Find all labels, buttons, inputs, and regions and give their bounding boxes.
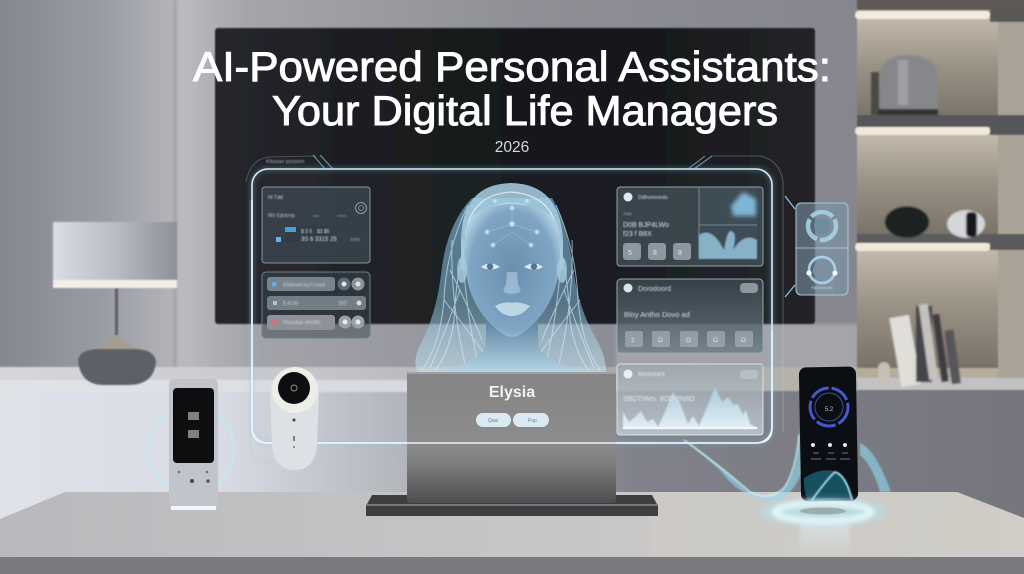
panel: finance card: 3S 6 3315 25 [301, 237, 337, 243]
panel: devices card: 2 [631, 337, 635, 344]
panel: activity chart [617, 364, 763, 435]
task row two: $ 4135 [283, 301, 299, 307]
device: smartphone: 5.2 [825, 407, 834, 413]
low cabinet [0, 367, 1024, 530]
title: Your Digital Life Managers [272, 87, 778, 134]
task row three: Fhscdlan drfrsfbt [283, 320, 321, 326]
ears [457, 257, 467, 283]
panel: weather card: f23 f B8X [623, 231, 652, 238]
title: AI-Powered Personal Assistants: [193, 43, 831, 90]
table top [0, 492, 1024, 574]
panel: devices card: Bloy Antho Dovo ad [624, 310, 690, 319]
device: smart display [148, 379, 234, 510]
hair [415, 198, 606, 372]
panel: activity chart: SBDTIWrs. 6OD 0NIIO [623, 396, 695, 403]
button: right: Pup [528, 418, 537, 424]
device: smart camera [270, 367, 319, 470]
mouth [495, 302, 530, 316]
panel: finance card: $3 $5 [317, 229, 330, 235]
neck and shoulders [436, 320, 590, 372]
side widget: Rasxornsdo [811, 285, 833, 290]
panel: devices card: Ω [686, 337, 691, 344]
shelf books [878, 304, 961, 387]
panel: weather card: 5 [628, 250, 632, 257]
charging ring [759, 499, 887, 525]
panel: devices card: Ω [741, 337, 746, 344]
panel: weather card: 8 [653, 250, 657, 257]
panel: weather card [617, 187, 763, 266]
panel: finance card: Wo Ejtstvng [268, 213, 295, 219]
device: smartphone [799, 367, 858, 501]
head crown [461, 183, 563, 270]
panel: finance card: Hi Tdd [268, 195, 283, 201]
task row two [267, 296, 366, 310]
button: left [476, 413, 511, 427]
assistant name: Elysia [489, 384, 535, 401]
panel: devices card [617, 279, 763, 353]
data wave behind phone [683, 430, 891, 500]
frame tag label: Kitasao pzssion [266, 159, 305, 165]
year: 2026 [495, 139, 529, 156]
panel: weather card: Yvdo [623, 211, 633, 216]
task row one: Ehtdrsen:tu:f l-rxsd [283, 282, 325, 288]
right shelving unit [855, 0, 1024, 391]
nose [504, 272, 520, 294]
panel: devices card: Dorodoord [638, 286, 671, 293]
panel: activity chart: Bdsbstant [638, 372, 665, 378]
face [465, 204, 560, 337]
side widget [785, 196, 848, 297]
panel: weather card: D0B BJP4LWo [623, 222, 669, 229]
holographic frame [246, 155, 783, 462]
panel: finance card: 3300 [350, 237, 361, 242]
shelf vase [871, 55, 938, 115]
title [193, 43, 831, 134]
area chart [623, 387, 757, 429]
panel: weather card: Ddhomnedo [638, 195, 668, 201]
panel: task list [262, 272, 370, 338]
panel: weather card: 8 [678, 250, 682, 257]
panel: finance card: xxp [313, 213, 320, 218]
eyes [481, 263, 543, 270]
neural points [485, 199, 539, 247]
panel: devices card: Ω [658, 337, 663, 344]
shelf ornaments [885, 206, 985, 238]
task row two: 25D [338, 301, 348, 307]
hologram avatar [415, 183, 606, 372]
button: right [513, 413, 549, 427]
frame front edge [252, 200, 772, 443]
panel: finance card: $ 3 5 [301, 229, 312, 235]
laptop [366, 372, 658, 516]
panel: devices card: Ω [713, 337, 718, 344]
panel: finance card: xxxxx [337, 213, 347, 218]
table lamp [53, 222, 177, 385]
wall-mounted dark screen [215, 28, 815, 324]
panel: finance card [262, 187, 370, 263]
weather imagery [699, 188, 757, 259]
button: left: Qasi [488, 418, 498, 424]
